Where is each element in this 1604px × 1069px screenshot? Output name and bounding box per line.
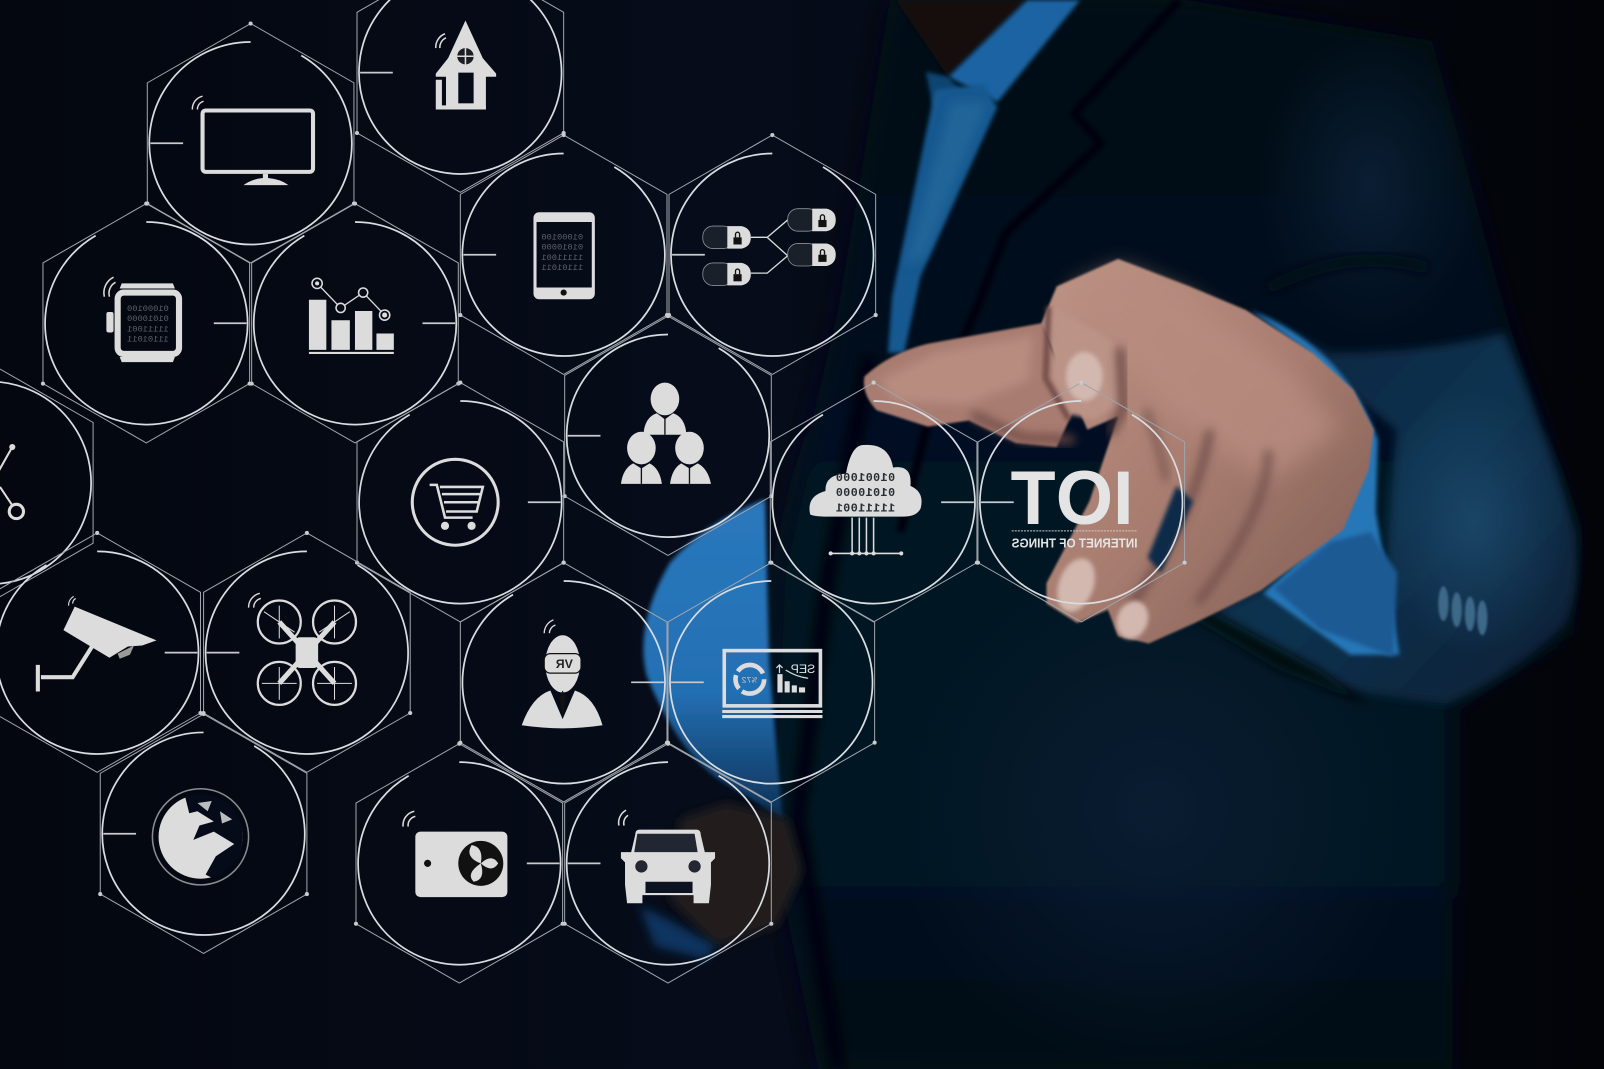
hexagon cell: security camera [0, 531, 203, 772]
back of hand [1041, 259, 1374, 643]
hexagon cell: IoT label: INTERNET OF THINGS [1011, 535, 1138, 550]
hexagon cell: tablet: 11111001 [541, 253, 583, 263]
index finger light [880, 336, 1033, 404]
shirt collar [948, 0, 1080, 102]
jacket shoulder highlight [1258, 31, 1483, 338]
hexagon cell: partial left node [0, 363, 93, 603]
jacket body [767, 0, 1575, 1069]
tie [888, 84, 997, 353]
neck [896, 0, 1027, 77]
hexagon cell: smart watch: 01010000 [127, 314, 169, 324]
hexagon cell: smart home [355, 0, 566, 192]
hexagon cell: IoT cloud: 01010000 [836, 486, 895, 500]
hexagon cell: drone [202, 531, 412, 772]
finger nails [1050, 352, 1153, 643]
sleeve highlight [1376, 389, 1570, 655]
hexagon cell: analytics chart [250, 202, 460, 443]
left side of jacket shadow [798, 358, 870, 1069]
left hand [670, 803, 803, 946]
hexagon cell: smart TV [145, 21, 356, 263]
hexagon cell: VR user [458, 561, 669, 802]
hexagon cell: tablet: 01010000 [541, 243, 583, 253]
index finger underside [972, 414, 1074, 440]
hexagon cell: IoT cloud [768, 381, 979, 622]
hexagon cell: smart watch: 11101011 [127, 335, 169, 345]
shoulder folds [1268, 260, 1427, 288]
hexagon cell: VR user: VR [556, 657, 573, 671]
curled middle finger [1052, 307, 1120, 419]
jacket sleeve [1195, 310, 1577, 704]
hexagon cell: dashboard laptop: SEP [791, 662, 815, 676]
hexagon cell: shopping cart [355, 381, 566, 622]
hexagon cell: smart watch: 11111001 [127, 324, 169, 334]
left shirt tail [643, 499, 783, 818]
finger gap with dark shirt [1148, 486, 1193, 573]
hand [864, 259, 1374, 643]
hexagon cell: connected car [563, 742, 773, 983]
lapel seam [900, 0, 1179, 532]
left cuff [639, 905, 716, 960]
hexagon cell: tablet [458, 133, 669, 374]
knuckles highlight [1069, 268, 1340, 481]
hexagon cell: smart fan [354, 742, 565, 983]
hexagon cell: IoT label: IOT [1011, 456, 1133, 541]
finger separations [1128, 430, 1210, 610]
jacket body highlight [890, 542, 1422, 1069]
hexagon cell: globe [98, 712, 309, 953]
sleeve buttons [1438, 586, 1487, 635]
index finger [864, 323, 1074, 447]
hexagon cell: IoT cloud: 11111001 [836, 501, 895, 515]
shadow beneath hand [1195, 604, 1371, 706]
hexagon cell: smart watch: 01000100 [127, 304, 169, 314]
hexagon cell: tablet: 11101011 [541, 263, 583, 273]
hexagon cell: people network [563, 314, 773, 555]
hexagon cell: dashboard laptop: %72 [741, 675, 757, 685]
hexagon cell: data locks [667, 133, 878, 374]
hexagon cell: IoT label [976, 381, 1187, 622]
hexagon cell: dashboard laptop [666, 561, 877, 802]
shirt cuff [1250, 310, 1399, 655]
photo: businessman in suit [639, 0, 1577, 1069]
hexagon cell: IoT cloud: 01001000 [836, 471, 895, 485]
hexagon cell: smart watch [41, 202, 252, 443]
hexagon cell: tablet: 01000100 [541, 232, 583, 242]
